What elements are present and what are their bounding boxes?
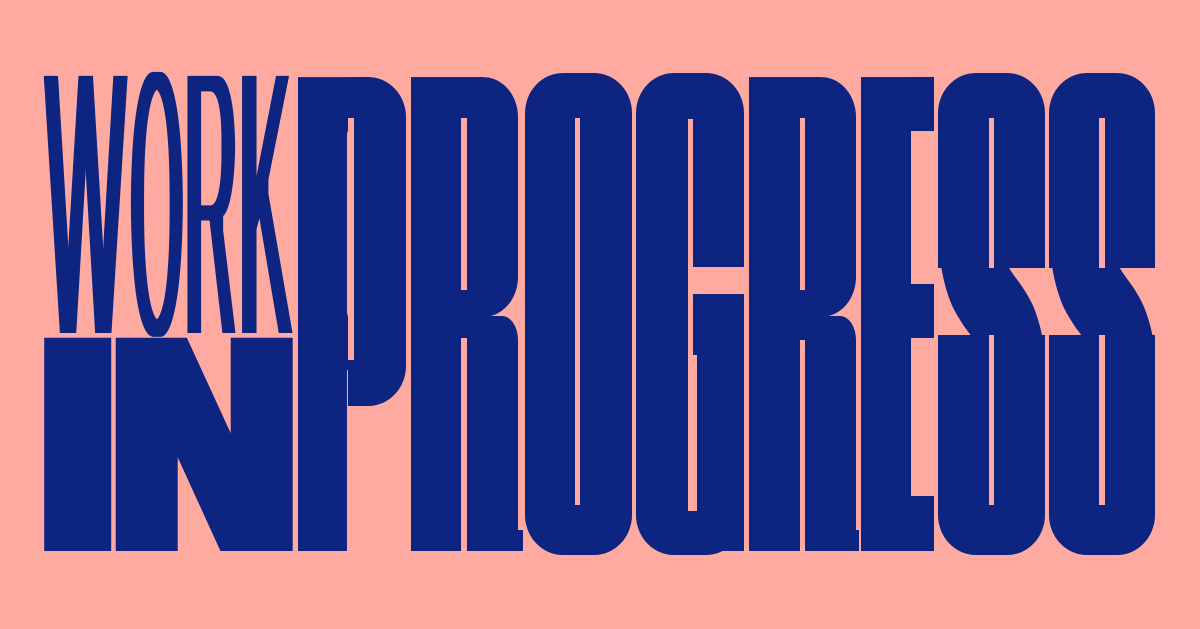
heading word: IN [42, 270, 295, 617]
poster background and wordmark [44, 72, 1155, 555]
heading word: WORK [46, 0, 292, 425]
letter I: I [42, 271, 113, 617]
letter N: N [114, 270, 295, 617]
heading word: PROGRESS [298, 73, 1155, 555]
